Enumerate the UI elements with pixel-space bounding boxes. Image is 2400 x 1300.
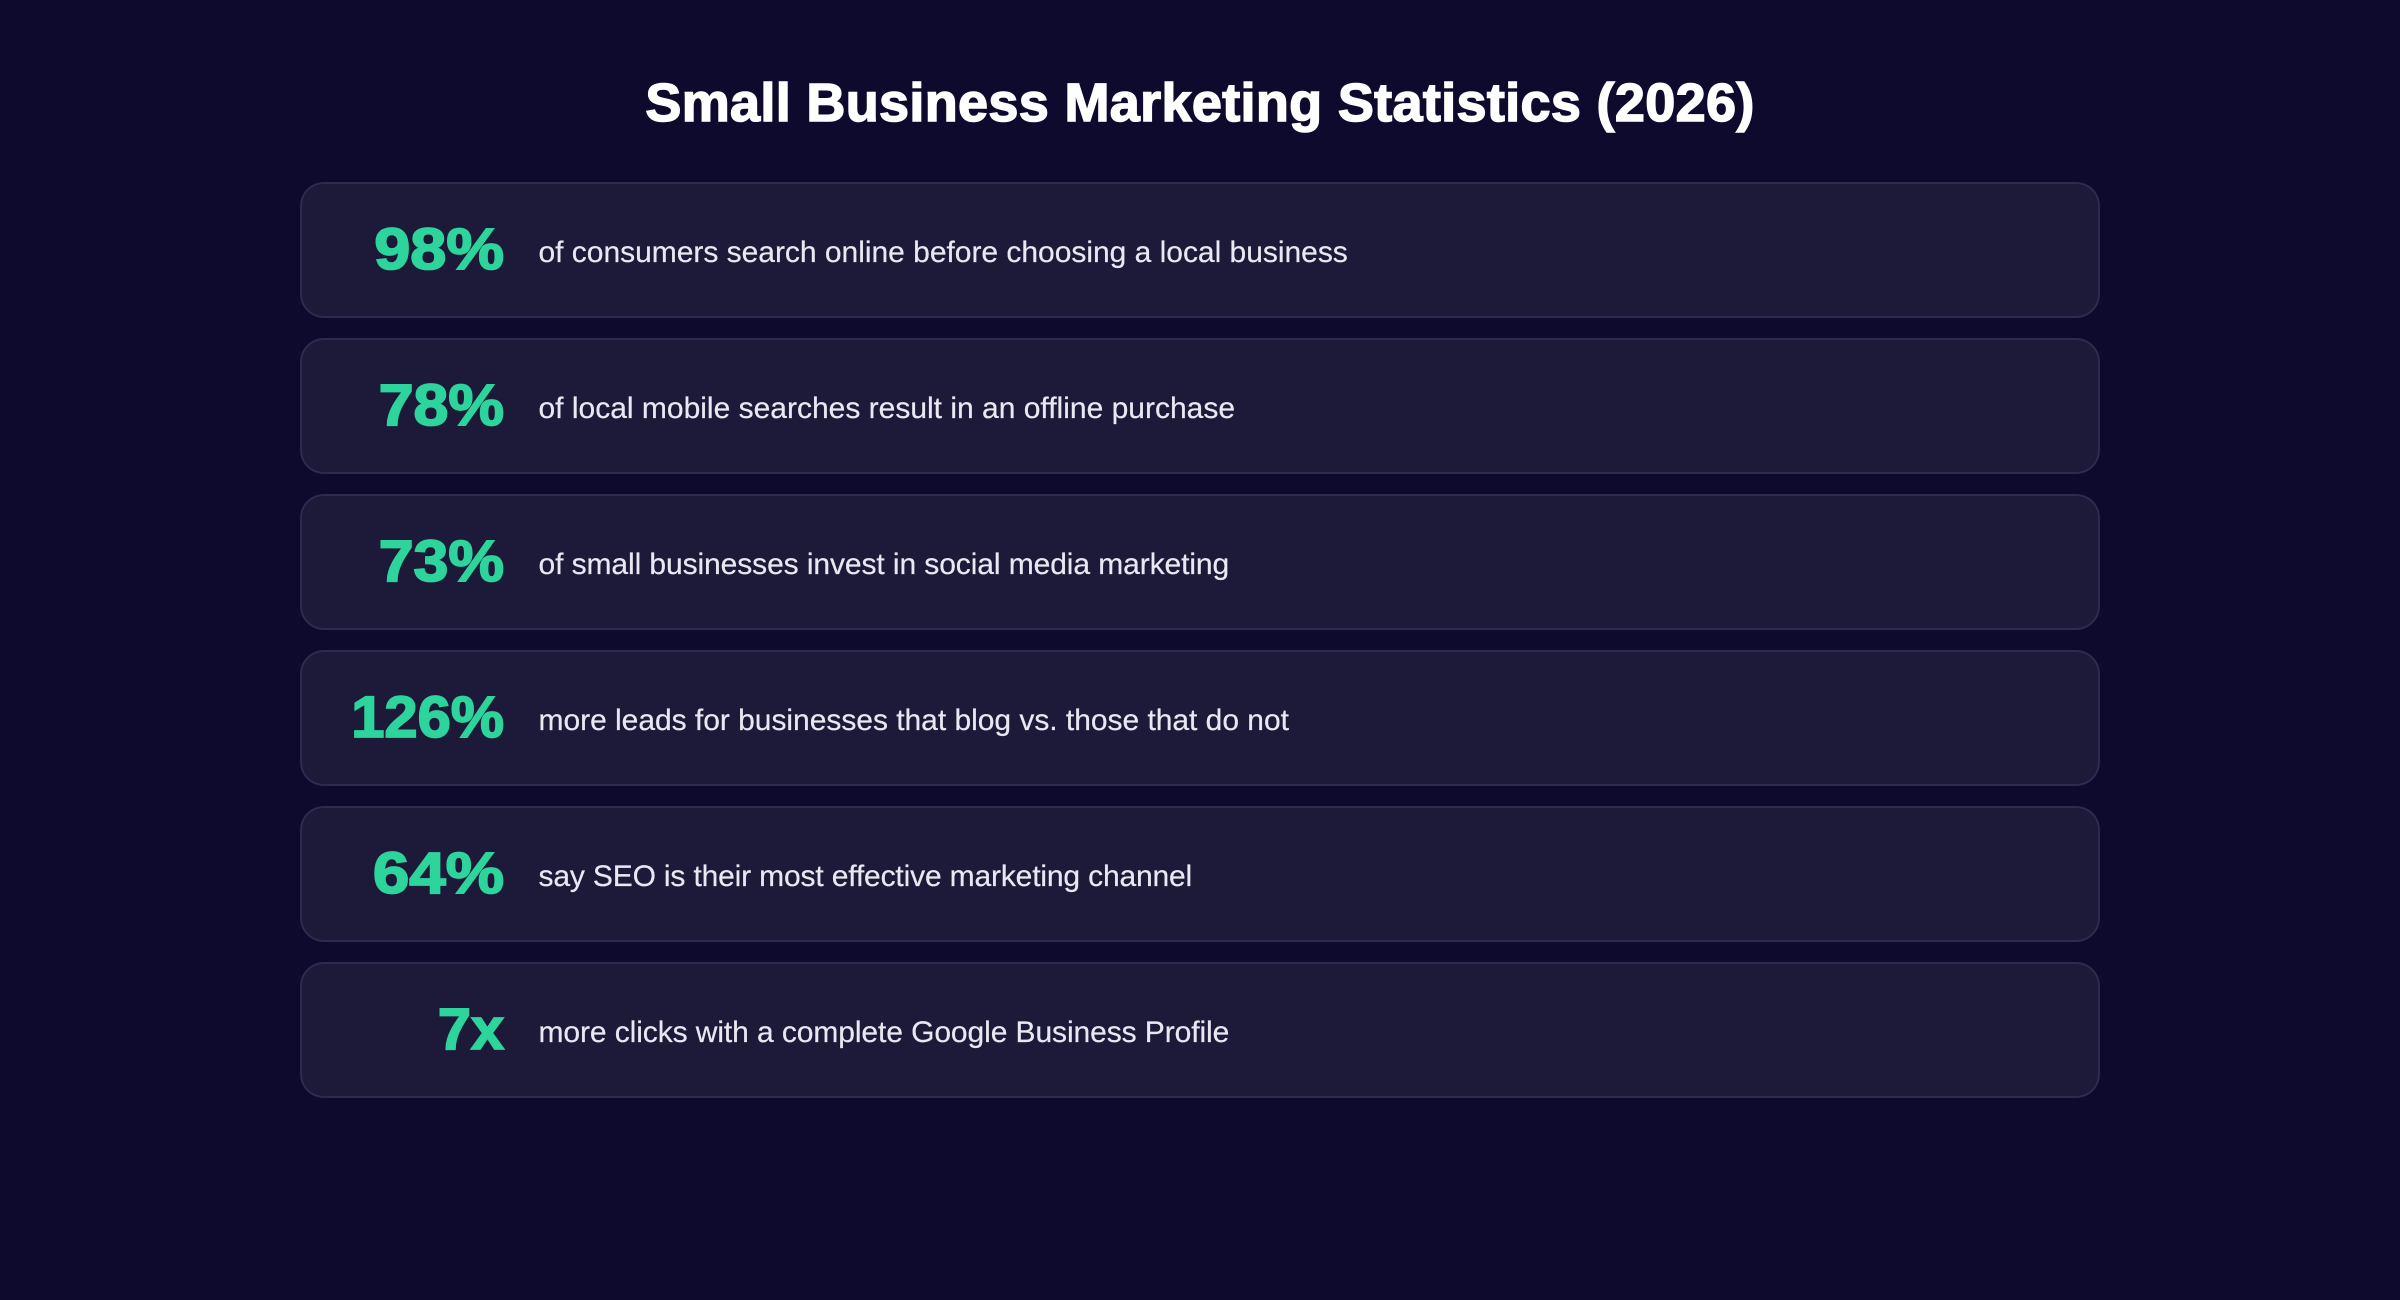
stat description: SEO: say SEO is their most effective marketing channel: [538, 860, 1192, 893]
panel: stat 64%: [300, 806, 2100, 942]
stat description: blogging leads: more leads for businesses that blog vs. those that do not: [538, 704, 1289, 737]
stat value: 78%: 78%: [379, 373, 504, 438]
stat description: mobile searches: of local mobile searches result in an offline purchase: [538, 392, 1235, 425]
stat description: online search: of consumers search online before choosing a local business: [538, 236, 1348, 269]
panel: stat 73%: [300, 494, 2100, 630]
stat value: 7x: 7x: [438, 997, 504, 1062]
panel: stat 7x: [300, 962, 2100, 1098]
panel: stat 126%: [300, 650, 2100, 786]
stat description: social media: of small businesses invest in social media marketing: [538, 548, 1229, 581]
stat description: Google Business Profile: more clicks with a complete Google Business Profile: [538, 1016, 1229, 1049]
title: Small Business Marketing Statistics (2026): [645, 73, 1755, 133]
panel: stat 98%: [300, 182, 2100, 318]
stat value: 126%: 126%: [351, 685, 504, 750]
stat value: 98%: 98%: [374, 217, 504, 282]
stat value: 64%: 64%: [373, 841, 504, 906]
stat value: 73%: 73%: [379, 529, 504, 594]
panel: stat 78%: [300, 338, 2100, 474]
